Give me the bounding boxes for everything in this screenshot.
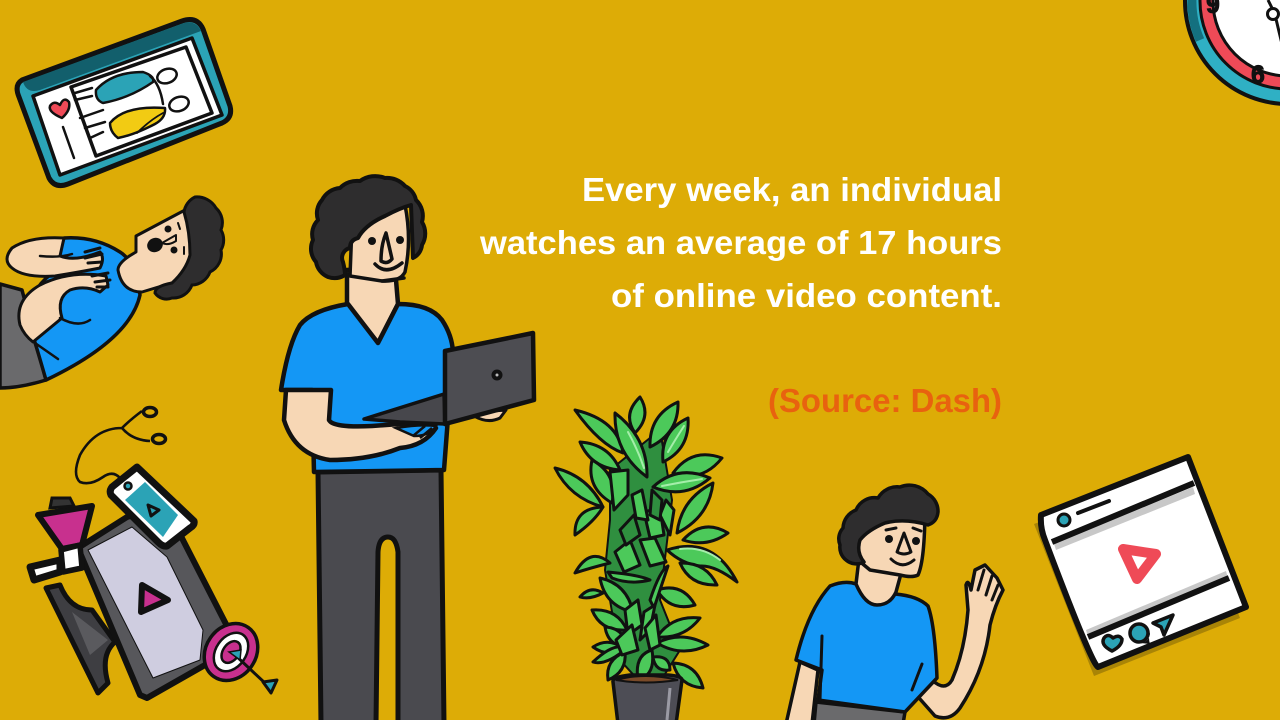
grey trousers [814,702,905,720]
trousers [318,470,444,720]
middle leaves [615,540,640,572]
monitor stand [46,585,115,693]
figure: waving man [786,485,1003,720]
target [193,613,269,691]
icon: clock: 6 [1251,61,1265,89]
text block: statistic [479,172,1002,315]
text block: statistic: Every week, an individual [582,172,1002,209]
hair [311,176,425,278]
arm [284,390,436,460]
megaphone [38,506,92,549]
icon: phone with shoes [17,20,231,186]
left arm [786,662,818,720]
monitor body [78,505,228,698]
figure: man lying with hands on chest [0,197,224,388]
icon: monitor with phone, megaphone and target [30,408,277,698]
earphones [76,408,166,483]
face [350,205,408,281]
shirt [281,304,453,472]
text block: statistic: watches an average of 17 hours [479,225,1002,262]
hand under laptop [474,410,506,421]
source citation: (Source: Dash) [768,383,1002,420]
raised arm [912,565,1003,718]
hair [839,485,938,564]
outer leaves [630,397,645,433]
face [858,505,925,576]
figure: standing man with laptop [281,176,534,720]
small phone [110,467,194,546]
play button [1123,549,1156,579]
plant stem mass [605,430,680,682]
neck [347,268,398,343]
neck [856,550,902,605]
icon: video post card [1034,457,1246,676]
pot [613,675,682,720]
laptop [364,394,445,424]
icon: clock [1185,0,1280,104]
shirt [796,582,937,712]
text block: statistic: of online video content. [611,278,1002,315]
icon: potted plant [555,397,737,720]
